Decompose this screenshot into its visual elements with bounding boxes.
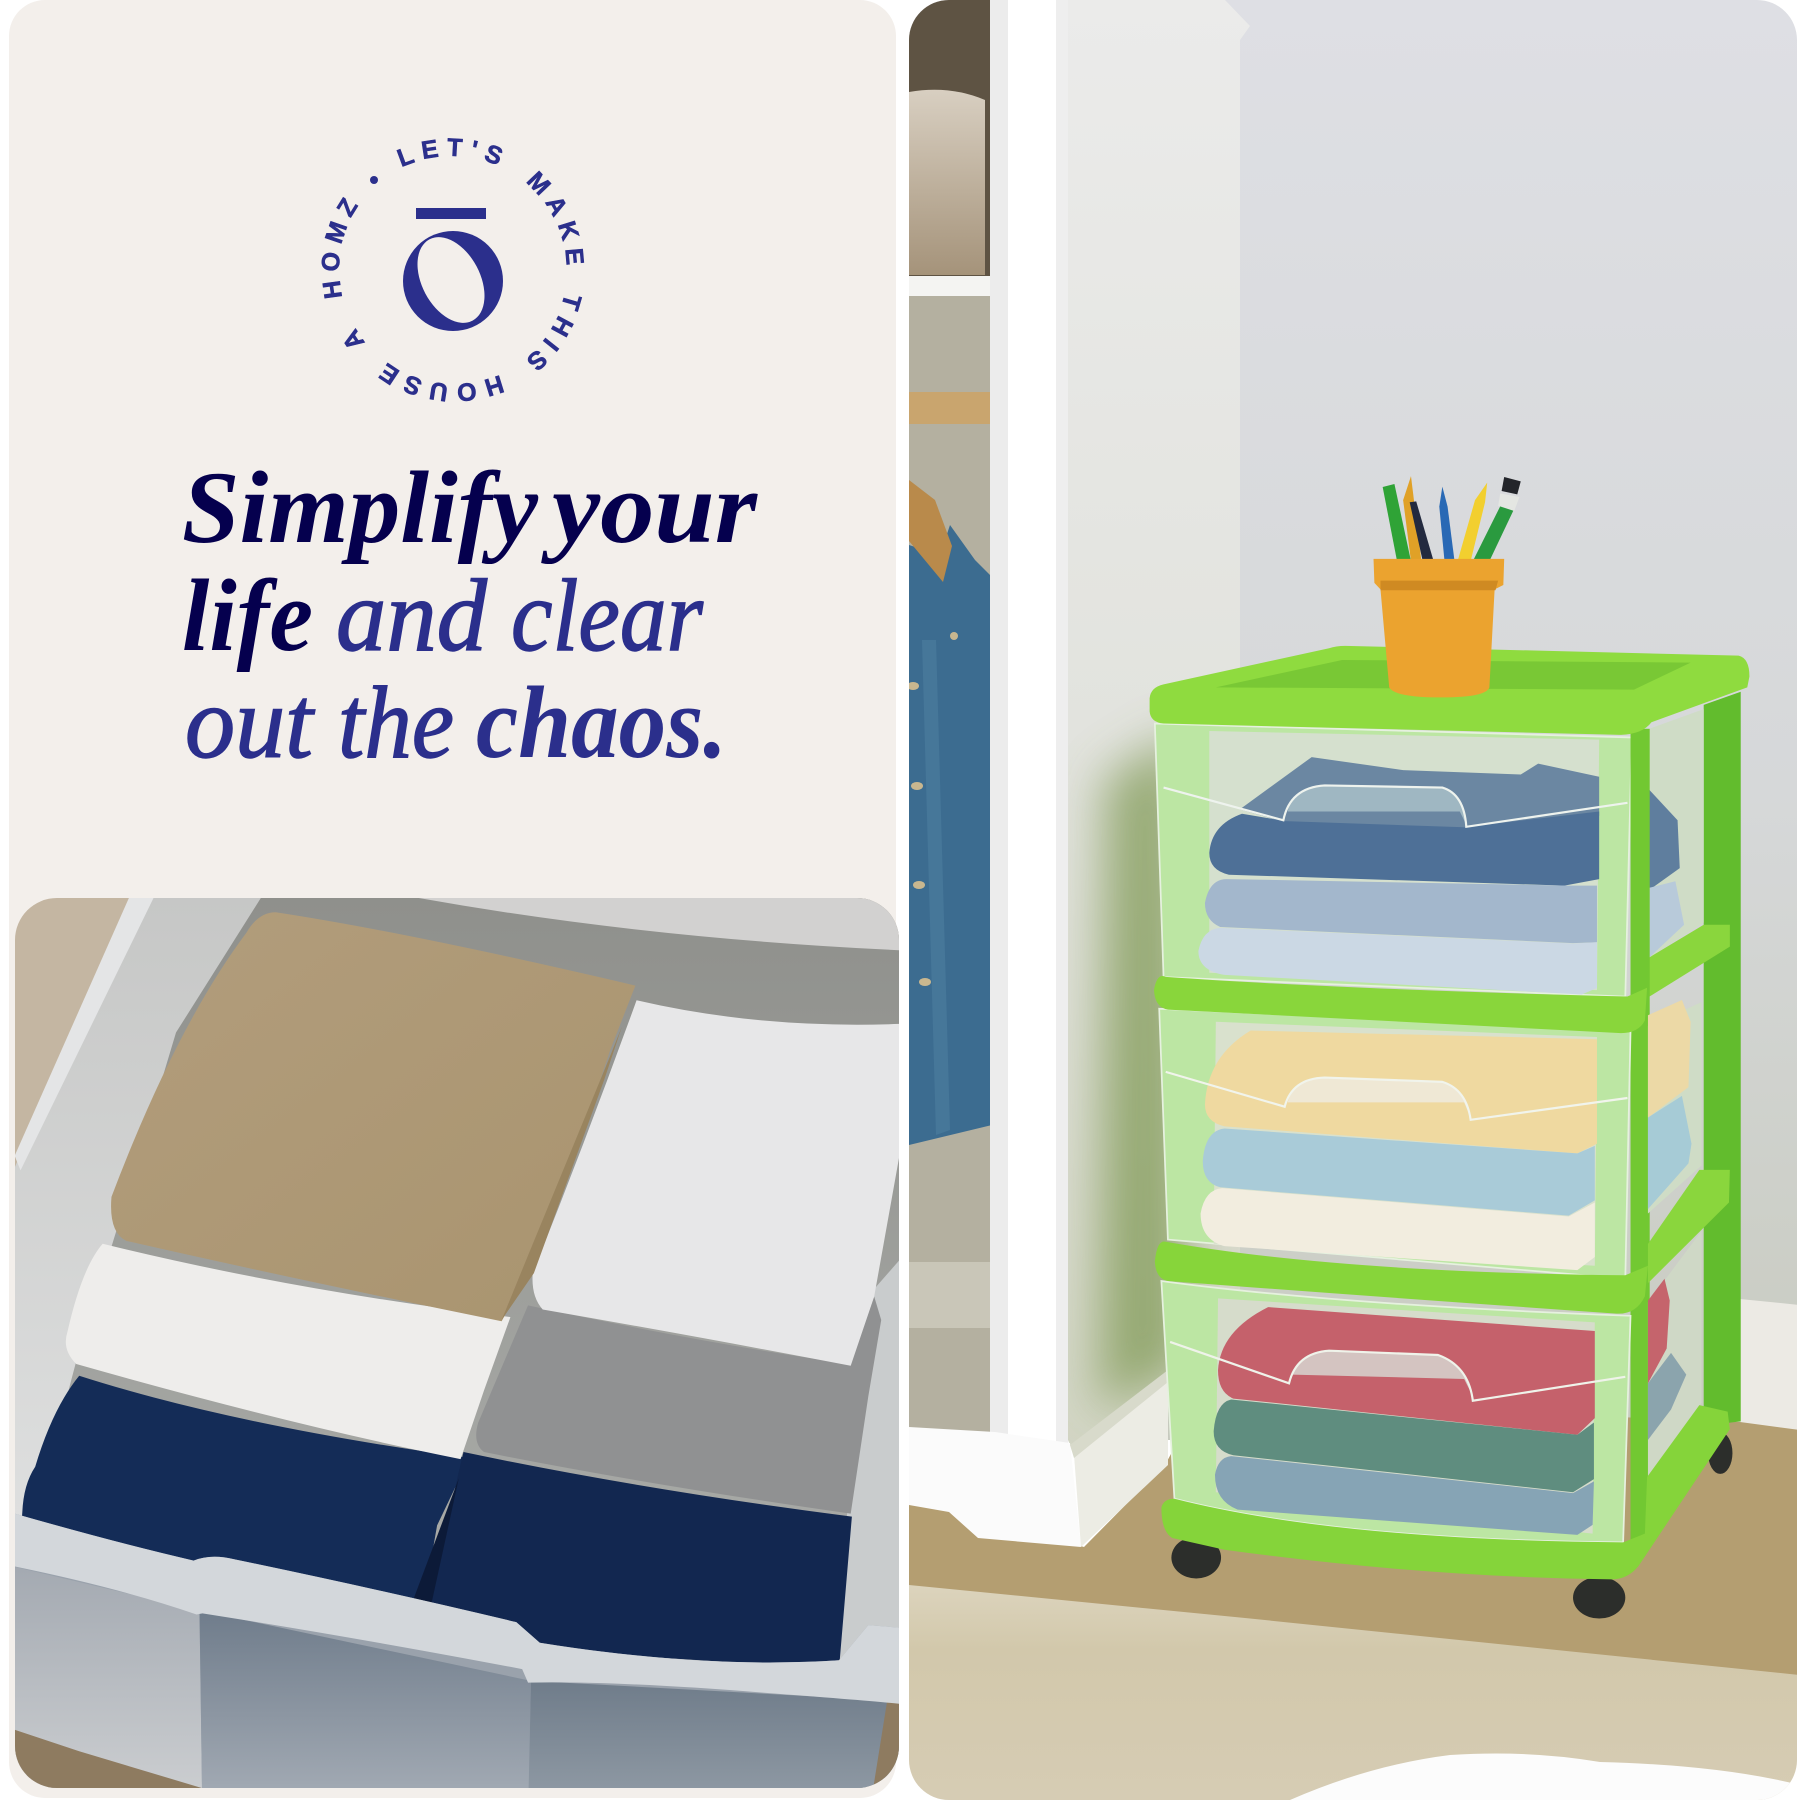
bin front rim bbox=[0, 1511, 904, 1704]
right rear post bbox=[1704, 692, 1741, 1426]
drawer 1 towel light blue bbox=[1205, 879, 1597, 943]
gray garment bbox=[476, 1297, 881, 1514]
drawer 2 handle bbox=[1166, 1072, 1627, 1120]
bin left wall bbox=[15, 898, 261, 1520]
gap between navy garments bbox=[414, 1478, 459, 1605]
green reflection on cabinet bbox=[1100, 730, 1185, 1410]
drawer 3 towel blue-grey bbox=[1215, 1456, 1594, 1535]
drawer 3 side window bbox=[1648, 1231, 1702, 1477]
bin front base bbox=[0, 1514, 904, 1800]
black pen bbox=[1410, 501, 1434, 561]
wooden clothes rod bbox=[909, 392, 994, 424]
front post bbox=[1631, 729, 1650, 1548]
towel side dark blue bbox=[1649, 790, 1680, 890]
blue pen bbox=[1439, 487, 1455, 561]
bin interior back bbox=[68, 898, 899, 1660]
drawer 3 frame bbox=[1161, 1281, 1631, 1542]
heading: and bbox=[336, 559, 487, 673]
logo: circular badge bbox=[322, 138, 584, 402]
bin back rim bbox=[417, 898, 904, 950]
drawer 2 towel yellow bbox=[1205, 1030, 1597, 1153]
logo ring text: LET'S MAKE THIS HOUSE A HOMZ bbox=[322, 138, 584, 402]
closet base side face bbox=[1074, 1380, 1168, 1547]
bin front wall centre bbox=[200, 1614, 531, 1780]
basket on shelf bbox=[909, 90, 985, 275]
towel side pale blue bbox=[1649, 881, 1684, 957]
tan floor at bottom left bbox=[15, 1730, 202, 1788]
logo dot separator bbox=[370, 176, 378, 184]
panel: cream left card bbox=[9, 0, 896, 1798]
drawer 2 window bbox=[1214, 1022, 1597, 1266]
heading bbox=[182, 451, 758, 780]
heading: your bbox=[540, 451, 758, 565]
front wheel right bbox=[1573, 1577, 1625, 1619]
bin front wall right bbox=[528, 1682, 899, 1788]
shirt placket bbox=[922, 640, 950, 1135]
navy garment left bbox=[22, 1376, 462, 1598]
heading: Simplify bbox=[182, 451, 539, 565]
cart: upper section bbox=[1150, 476, 1749, 1548]
drawer 2 side window bbox=[1648, 1002, 1702, 1213]
blue towel side bbox=[1648, 1096, 1692, 1209]
white rug highlight bbox=[1290, 1754, 1800, 1800]
heading: the bbox=[338, 666, 454, 780]
white garment right bbox=[532, 1000, 904, 1366]
photo: folded clothes in bin bbox=[0, 880, 939, 1800]
photo: green storage cart in room bbox=[907, 0, 1800, 1800]
white closet base bbox=[909, 1427, 1081, 1547]
closet top dark interior bbox=[909, 0, 994, 280]
bin left rim highlight bbox=[15, 898, 154, 1170]
drawer 3 towel red bbox=[1218, 1307, 1595, 1435]
orange pencil bbox=[1403, 476, 1421, 561]
yellow pencil bbox=[1458, 483, 1487, 561]
cup rim shade bbox=[1380, 581, 1498, 590]
drawer 1 bottom lip bbox=[1154, 976, 1647, 1033]
tan garment fold bbox=[502, 1027, 622, 1320]
green pencil with eraser bbox=[1473, 504, 1514, 561]
shirt buttons bbox=[907, 632, 958, 986]
drawer 1 frame bbox=[1155, 724, 1632, 997]
cart: lower section bbox=[1154, 976, 1732, 1619]
drawer 3 handle bbox=[1170, 1342, 1625, 1401]
logo macron bar bbox=[416, 208, 486, 219]
grey towel side bbox=[1648, 1353, 1686, 1440]
drawer 1 handle bbox=[1164, 785, 1627, 827]
white pillar bbox=[990, 0, 1068, 1460]
drawer 3 towel green bbox=[1214, 1399, 1594, 1492]
closet white shelf bbox=[909, 276, 994, 296]
room wall bbox=[909, 0, 1800, 1440]
drawer 1 side window bbox=[1649, 709, 1704, 957]
drawer 1 towel main blue bbox=[1209, 812, 1599, 886]
drawer 1 side rail bbox=[1649, 925, 1730, 997]
heading: life bbox=[182, 559, 313, 673]
floor bbox=[909, 1417, 1797, 1675]
floor rug bbox=[909, 1585, 1800, 1800]
drawer 2 bottom lip bbox=[1155, 1242, 1648, 1314]
drawer 2 towel blue bbox=[1203, 1129, 1595, 1216]
closet lower interior bbox=[909, 296, 994, 1456]
closet inner baseboard bbox=[909, 1262, 994, 1328]
tan floor at bottom right bbox=[874, 1702, 899, 1784]
drawer 2 frame bbox=[1159, 1009, 1631, 1279]
white garment left bbox=[66, 1244, 510, 1459]
tan garment bbox=[111, 912, 635, 1321]
heading: chaos. bbox=[476, 666, 727, 780]
green pen bbox=[1383, 484, 1411, 561]
cart lid bbox=[1150, 646, 1749, 735]
drawer 1 towel pale bbox=[1198, 928, 1597, 994]
bin right wall bbox=[840, 1260, 899, 1659]
right baseboard bbox=[1736, 1299, 1797, 1430]
heading: clear bbox=[511, 559, 704, 673]
drawer 1 towel top blue bbox=[1240, 757, 1599, 829]
wooden hanger bbox=[909, 480, 952, 582]
drawer 3 window bbox=[1216, 1298, 1595, 1534]
pencil eraser bbox=[1502, 477, 1521, 494]
back wall of room bbox=[0, 880, 939, 1800]
closet interior bbox=[907, 0, 994, 1456]
pencil ferrule bbox=[1498, 494, 1519, 511]
pencil cup group bbox=[1374, 476, 1521, 697]
denim shirt bbox=[909, 525, 992, 1145]
logo letter o bbox=[403, 226, 503, 334]
drawer 2 towel cream bbox=[1201, 1188, 1595, 1270]
rear wheel bbox=[1708, 1432, 1732, 1474]
cabinet side panel bbox=[1068, 0, 1250, 1455]
red towel side bbox=[1648, 1279, 1670, 1383]
drawer 1 window bbox=[1209, 731, 1599, 990]
orange cup bbox=[1374, 559, 1504, 697]
front wheel left bbox=[1171, 1537, 1221, 1578]
rail between drawers 2 and 3 bbox=[1648, 1170, 1730, 1283]
bin front wall left bbox=[15, 1568, 202, 1788]
closet base trim bbox=[1070, 1370, 1168, 1458]
heading: out bbox=[185, 666, 315, 780]
navy garment right bbox=[422, 1452, 852, 1669]
lid recess bbox=[1216, 660, 1691, 690]
cart base bbox=[1161, 1405, 1730, 1579]
yellow towel side bbox=[1648, 1000, 1691, 1118]
